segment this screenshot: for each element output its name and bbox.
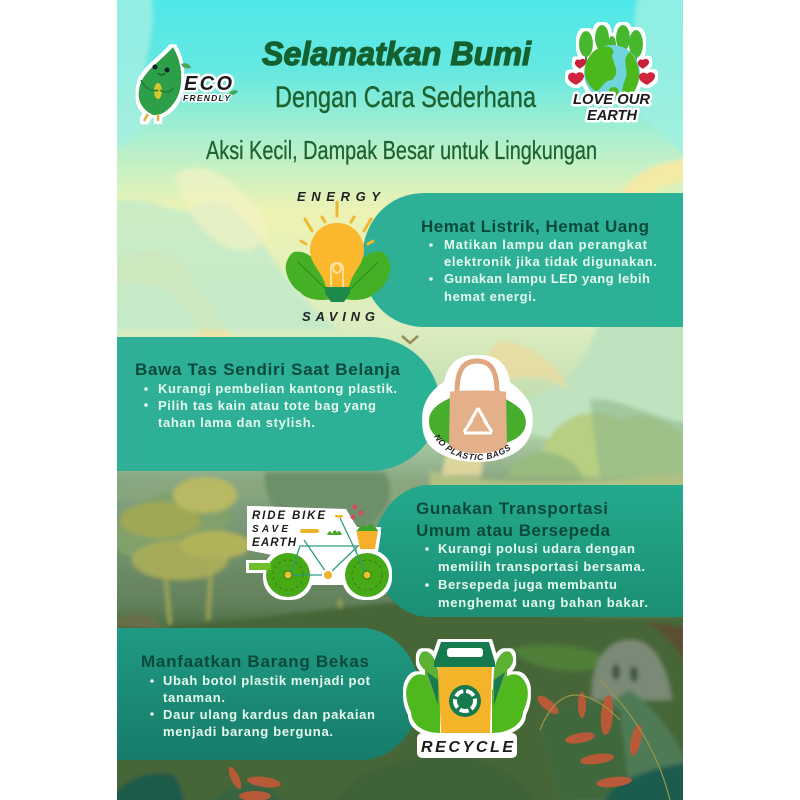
tagline: Aksi Kecil, Dampak Besar untuk Lingkungan xyxy=(206,135,597,165)
panel: energy xyxy=(362,193,683,327)
icon: eco friendly leaf: ECO xyxy=(184,73,232,95)
text: transportasi: memilih transportasi bersama. xyxy=(438,559,645,574)
text: manfaatkan: tanaman. xyxy=(163,690,225,705)
panel: bag xyxy=(117,337,440,471)
text: hemat listrik xyxy=(421,217,657,304)
text: hemat listrik: elektronik jika tidak digunakan. xyxy=(444,254,657,269)
text: transportasi xyxy=(416,499,648,610)
icon: eco friendly leaf: FRENDLY xyxy=(183,93,231,103)
panel: transport xyxy=(373,485,683,617)
text: manfaatkan: Ubah botol plastik menjadi pot xyxy=(163,673,371,688)
text: manfaatkan xyxy=(141,652,375,739)
text: transportasi: Umum atau Bersepeda xyxy=(416,521,611,540)
text: hemat listrik: Gunakan lampu LED yang lebih xyxy=(444,271,650,286)
text: transportasi: Bersepeda juga membantu xyxy=(438,577,617,592)
text: transportasi: Kurangi polusi udara dengan xyxy=(438,541,635,556)
icon: energy saving bulb xyxy=(286,189,390,324)
icon: recycle bin: RECYCLE xyxy=(421,739,514,756)
text: manfaatkan: Manfaatkan Barang Bekas xyxy=(141,652,369,671)
text: bawa tas: Pilih tas kain atau tote bag yang xyxy=(158,398,376,413)
icon: energy saving bulb: ENERGY xyxy=(297,189,381,204)
text: hemat listrik: Matikan lampu dan perangkat xyxy=(444,237,648,252)
text: manfaatkan: menjadi barang berguna. xyxy=(163,724,333,739)
icon: ride bike: EARTH xyxy=(252,537,297,549)
icon: love our earth: LOVE OUR xyxy=(573,91,650,108)
text: hemat listrik: hemat energi. xyxy=(444,289,536,304)
icon: recycle bin xyxy=(406,642,528,756)
icon: no plastic bags: NO PLASTIC BAGS xyxy=(434,434,510,460)
icon: ride bike: SAVE xyxy=(252,524,288,535)
subtitle: Dengan Cara Sederhana xyxy=(275,81,536,114)
icon: ride bike xyxy=(249,504,389,597)
icon: energy saving bulb: SAVING xyxy=(302,309,375,324)
text: manfaatkan: Daur ulang kardus dan pakaian xyxy=(163,707,375,722)
icon: love our earth xyxy=(568,25,655,124)
text: transportasi: Gunakan Transportasi xyxy=(416,499,608,518)
panel: reuse xyxy=(117,628,420,760)
title: Selamatkan Bumi xyxy=(262,35,532,72)
icon: ride bike: RIDE BIKE xyxy=(252,510,325,522)
icon: eco friendly leaf xyxy=(139,47,238,121)
text: bawa tas: tahan lama dan stylish. xyxy=(158,415,315,430)
text: hemat listrik: Hemat Listrik, Hemat Uang xyxy=(421,217,649,236)
icon: love our earth: EARTH xyxy=(587,107,638,124)
background scene xyxy=(90,0,710,800)
text: bawa tas: Kurangi pembelian kantong plastik. xyxy=(158,381,397,396)
icon: no plastic bags xyxy=(422,355,533,462)
text: transportasi: menghemat uang bahan bakar. xyxy=(438,595,648,610)
text: bawa tas: Bawa Tas Sendiri Saat Belanja xyxy=(135,360,401,379)
text: bawa tas xyxy=(135,360,401,430)
